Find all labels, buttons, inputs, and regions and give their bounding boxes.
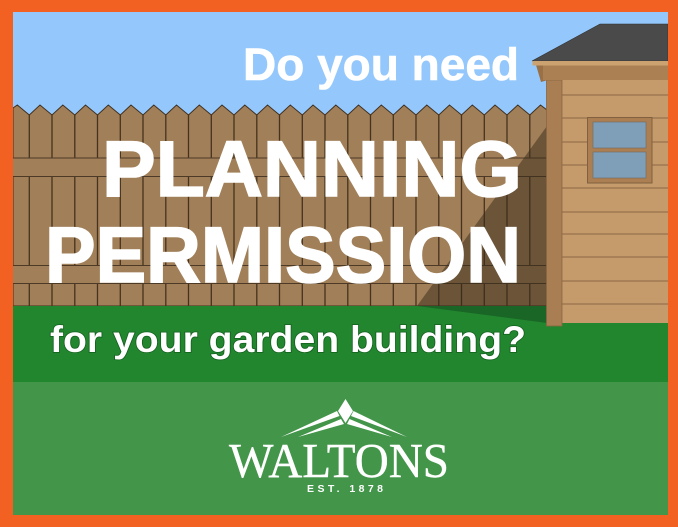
shed wall [560,78,668,323]
shed corner post [546,80,562,326]
heading line: Do you need: Do you need [243,39,519,90]
lawn, front section [13,382,668,515]
garden fence [12,105,547,306]
shed shadow on fence [417,126,547,306]
window frame [588,118,652,183]
lower window pane [593,152,646,178]
heading: PERMISSION: PERMISSION [45,210,521,299]
heading line: for your garden building?: for your garden building? [50,319,526,360]
logo wordmark: WALTONS [229,433,449,488]
picket gaps [29,115,530,306]
garden shed [532,24,668,326]
upper fence rail [12,158,547,176]
wall cladding lines [562,95,668,304]
lower fence rail [12,266,547,284]
lawn, back section [13,306,668,382]
logo roof emblem [281,399,407,437]
roof fascia [543,65,668,80]
roof [532,24,668,61]
roof trim [532,61,668,66]
upper window pane [593,122,646,148]
logo established date: EST. 1878 [307,483,383,495]
sky [13,12,668,142]
heading: PLANNING: PLANNING [102,124,522,213]
Waltons logo [229,399,449,495]
shed shadow on lawn [417,306,547,323]
fence boards [13,105,547,306]
roof soffit [536,65,548,82]
window [588,118,652,183]
